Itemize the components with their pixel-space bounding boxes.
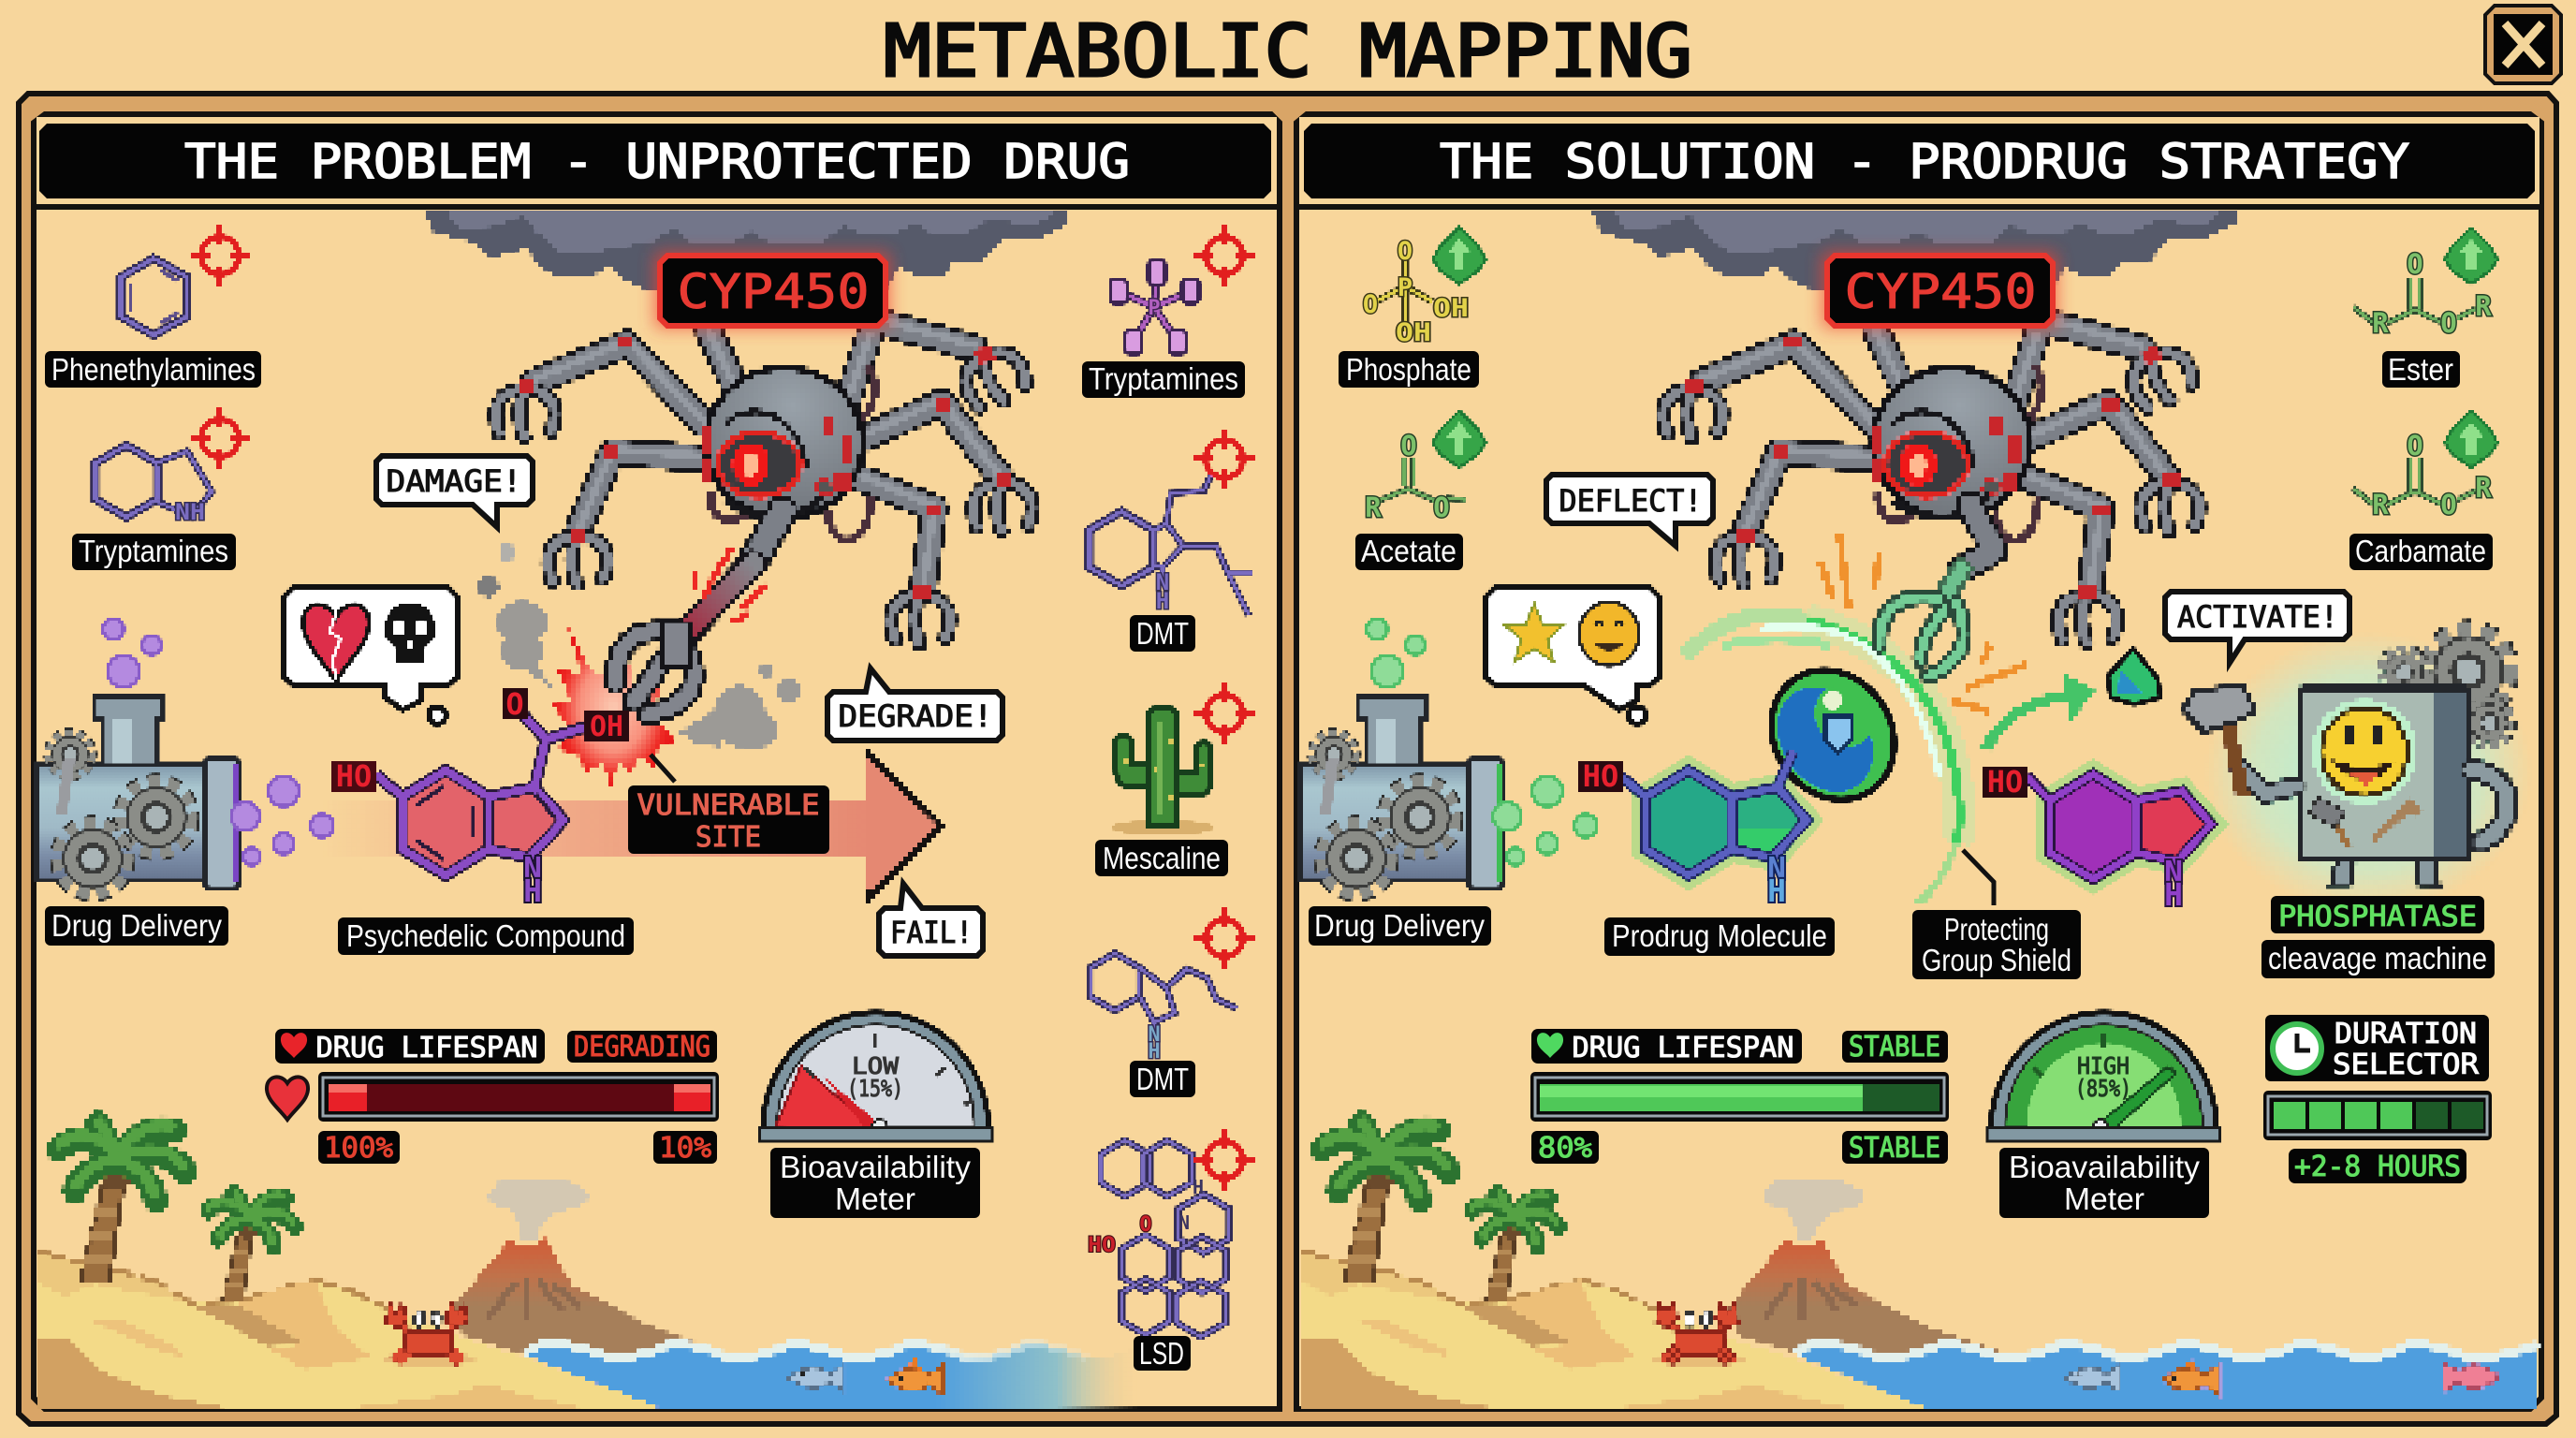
ocean [1795,1343,2539,1407]
CYP450 sign: CYP450 [1844,265,2037,320]
atom labels: problem molecules: H [1156,588,1169,614]
header bar [37,117,1278,207]
atom labels: solution molecules: HO [1583,758,1618,794]
atom labels: problem molecules: N [523,850,542,887]
duration selector heading [2265,1015,2489,1081]
scene art layer [1302,211,2539,1407]
speech bubble: star and smile [1486,586,1660,724]
drug lifespan heading: DRUG LIFESPAN [1573,1032,1793,1064]
fish: silver [789,1365,843,1391]
atom labels: problem molecules [175,297,1204,1257]
label: Bioavailability Meter: Bioavailability [2009,1150,2201,1184]
bubble: DEFLECT [1546,475,1713,546]
ocean foam [524,1343,1088,1358]
atom labels: solution molecules: O [2440,307,2457,339]
purple drug bubbles [103,619,333,865]
tag: stable: STABLE [1849,1132,1940,1165]
icon: phenethylamine ring [121,258,187,335]
atom labels: solution molecules: O [1363,290,1378,319]
crab [382,1303,476,1367]
palm tree: large [58,1122,185,1283]
atom labels: solution molecules: O [1398,237,1412,266]
scene art layer [37,211,1137,1407]
atom labels: solution molecules: O [2407,430,2423,462]
bioavailability gauge high: HIGH [2077,1052,2130,1079]
shield cap [1747,646,1919,824]
status: degrading: DEGRADING [574,1031,710,1064]
lifespan bar [1530,1072,1949,1122]
lifespan bar [318,1072,719,1122]
explosion [552,627,675,787]
atom labels: solution molecules: H [2164,876,2183,913]
prodrug molecule [1578,751,1807,875]
fish: orange [2163,1357,2219,1395]
atom labels: problem molecules: HO [1088,1234,1116,1257]
duration selector heading: DURATION [2334,1018,2477,1050]
atom labels: problem molecules: O [505,686,524,722]
label: vulnerable site [628,785,829,854]
icon: green gems [1433,227,2497,467]
volcano [1729,1178,2006,1369]
psychedelic molecule [331,688,629,875]
panel: the problem [34,114,1280,1409]
bubble: ACTIVATE [2165,592,2349,663]
atom labels: solution molecules: R [2475,472,2492,504]
label: DMT: DMT [1136,616,1189,651]
icon: LSD rings [1101,1140,1229,1337]
status: stable: STABLE [1849,1031,1940,1064]
label: Ester: Ester [2388,352,2453,387]
CYP450 cloud [1592,211,2236,290]
icon: ester [2353,277,2476,323]
palm tree: small [208,1192,294,1301]
atom labels: problem molecules: H [523,873,542,909]
deflected arm [1942,505,1995,599]
label: Carbamate: Carbamate [2355,534,2486,568]
panel: the solution [1296,114,2541,1409]
label: vulnerable site: VULNERABLE [637,789,820,822]
activated molecule [1983,767,2211,879]
label: PHOSPHATASE: PHOSPHATASE [2278,901,2477,933]
spider robot [1663,322,2200,643]
atom labels: solution molecules: O [2407,248,2423,280]
label: Bioavailability Meter: Bioavailability [780,1150,972,1184]
label: Drug Delivery: Drug Delivery [1314,908,1485,943]
drug lifespan heading: DRUG LIFESPAN [316,1032,537,1064]
icon: cactus [1111,707,1214,835]
label: Bioavailability Meter [770,1148,980,1218]
fish: pink [2443,1362,2499,1392]
icon: drug delivery pipe [37,697,240,893]
bubble: DEGRADE [827,668,1003,741]
CYP450 sign [655,253,889,328]
icon: drug delivery pipe [1300,697,1503,893]
orange sparks [1821,534,2027,712]
bioavailability gauge low: (15%) [847,1075,903,1102]
atom labels: solution molecules: R [2475,290,2492,322]
label: LSD: LSD [1139,1336,1184,1371]
machine glow [2204,632,2532,913]
ocean [524,1343,1137,1407]
icon: phosphate [1376,257,1432,332]
atom labels: solution molecules: O [1400,430,1417,462]
atom labels: solution molecules: O [2440,489,2457,521]
label: Bioavailability Meter: Meter [2064,1181,2144,1216]
label: Protecting Group Shield: Protecting [1944,912,2049,946]
tag: 100%: 100% [324,1132,393,1165]
panel background [1296,114,2541,1409]
label: Tryptamines left: Tryptamines [79,534,228,568]
palm tree: small [1471,1192,1558,1301]
bioavailability gauge high: (85%) [2075,1075,2131,1102]
label: Protecting Group Shield: Group Shield [1922,943,2071,977]
bioavailability gauge low [760,1012,991,1140]
bubble: DEFLECT: DEFLECT! [1559,483,1702,519]
label: leader to vulnerable site [651,755,675,782]
CYP450 cloud [425,211,1069,290]
atom labels: solution molecules [1363,237,2492,913]
fish: silver [2065,1365,2119,1391]
icon: DMT second form [1090,953,1237,1030]
bubble: DAMAGE: DAMAGE! [386,463,522,499]
atom labels: solution molecules: H [1767,873,1786,909]
label: Acetate: Acetate [1361,534,1456,568]
icons layer [37,226,1254,1337]
speech bubble: broken heart and skull [284,586,458,724]
header bar: THE PROBLEM - UNPROTECTED DRUG [184,135,1130,190]
deflected claw [1880,597,1964,676]
label: vulnerable site: SITE [695,821,761,854]
label: Phosphate: Phosphate [1346,352,1471,387]
tag: 10%: 10% [659,1132,711,1165]
bubble: FAIL [879,884,983,956]
CYP450 sign [1822,253,2056,328]
smoke clouds [478,544,800,749]
fish: orange [887,1357,944,1395]
atom labels: solution molecules: HO [1987,764,2023,800]
tag: 80%: 80% [1538,1132,1592,1165]
atom labels: solution molecules: R [2372,489,2389,521]
icon: close button [2485,6,2561,83]
atom labels: solution molecules: O [1433,492,1450,523]
header bar: THE SOLUTION - PRODRUG STRATEGY [1440,135,2409,190]
phosphatase machine [2183,630,2511,885]
atom labels: problem molecules: NH [175,499,205,525]
duration bar [2263,1091,2492,1140]
duration selector heading: SELECTOR [2333,1049,2480,1081]
atom labels: solution molecules: N [1767,850,1786,887]
bioavailability gauge low: LOW [852,1052,900,1079]
label: Tryptamines right: Tryptamines [1089,361,1238,396]
atom labels: solution molecules: N [2164,854,2183,890]
ocean foam [1795,1343,2539,1358]
icon: red targets [190,226,1254,1190]
atom labels: problem molecules: O [1139,1213,1152,1237]
bubble: DEGRADE: DEGRADE! [839,698,992,734]
atom labels: solution molecules: P [1398,273,1412,302]
atom labels: solution molecules: R [1365,492,1382,523]
header bar [1298,117,2539,207]
icon: tryptamine phosphate form [1110,260,1199,354]
CYP450 sign: CYP450 [678,265,869,320]
label: cleavage machine: cleavage machine [2268,941,2487,976]
icon: acetate [1376,457,1465,502]
label: Bioavailability Meter: Meter [835,1181,915,1216]
label: Phenethylamines: Phenethylamines [51,352,256,387]
attack arm [690,511,783,629]
label: Drug Delivery: Drug Delivery [51,908,222,943]
sand dunes [1302,1252,1924,1407]
green drug bubbles [1367,619,1597,865]
bubble: FAIL: FAIL! [890,915,973,950]
bubble: DAMAGE [376,456,533,527]
bubble: ACTIVATE: ACTIVATE! [2177,599,2338,635]
atom labels: problem molecules: N [1156,569,1169,595]
volcano [453,1178,730,1369]
atom labels: solution molecules: OH [1433,294,1469,323]
lifespan heart [267,1077,308,1120]
icon: DMT [1090,475,1252,615]
green activation arrow [1986,674,2095,749]
panel background [34,114,1280,1409]
label: Prodrug Molecule: Prodrug Molecule [1612,918,1827,953]
atom labels: solution molecules: R [2372,307,2389,339]
atom labels: problem molecules: H [1193,1176,1204,1198]
label: leader to shield [1963,850,1994,905]
atom labels: problem molecules: OH [590,711,623,743]
tag: duration hours: +2-8 HOURS [2294,1151,2461,1183]
label: Bioavailability Meter [1999,1148,2209,1218]
bioavailability gauge high [1988,1012,2220,1140]
spider robot [496,322,1032,643]
icon: tryptamine indole [95,446,212,517]
atom labels: problem molecules: HO [336,758,372,794]
label: Psychedelic Compound: Psychedelic Compound [346,918,625,953]
label: Mescaline: Mescaline [1103,841,1221,875]
shield arc [1685,614,1959,903]
atom labels: problem molecules: P [1148,297,1161,320]
crab [1652,1303,1746,1367]
label: Protecting Group Shield [1912,910,2081,979]
title: METABOLIC MAPPING [884,10,1692,94]
sand dunes [37,1252,658,1407]
vulnerable site arrow [323,754,941,899]
atom labels: solution molecules: OH [1396,318,1431,347]
atom labels: problem molecules: N [1148,1023,1161,1047]
icon: carbamate [2353,459,2476,505]
label: DMT second: DMT [1136,1062,1189,1096]
attack claw [616,623,694,715]
palm tree: large [1322,1122,1449,1283]
atom labels: problem molecules: H [1148,1040,1161,1064]
atom labels: problem molecules: N [1178,1211,1190,1234]
icons layer [1300,227,2497,893]
released gem [2108,649,2160,704]
